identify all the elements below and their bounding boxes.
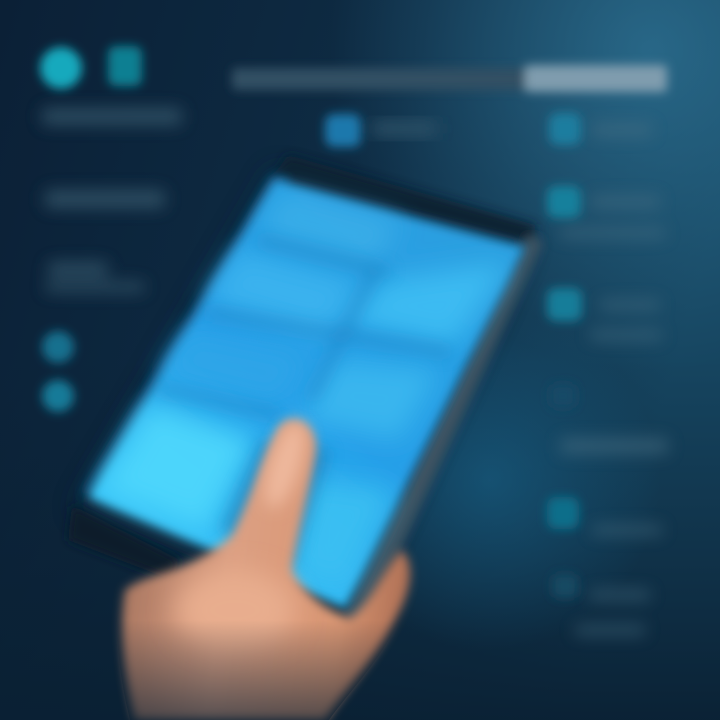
top centre icon and label [325,114,437,147]
title bar [232,65,667,92]
right column icons [547,113,582,598]
phone screen [88,180,525,608]
phone frame [68,155,543,625]
palm highlight [175,570,295,650]
finger shadow [220,440,330,570]
phone [68,155,543,625]
hand [100,418,430,720]
hand shape [122,420,410,720]
logo icons [40,46,142,89]
right column text placeholders [560,124,668,635]
screen divider lines [155,240,450,415]
hand fade [120,626,387,720]
left column text placeholders [42,108,182,292]
screen tiles [100,190,510,590]
phone shadow glow [75,170,530,620]
finger highlight [257,418,313,512]
left column icons [42,331,74,412]
